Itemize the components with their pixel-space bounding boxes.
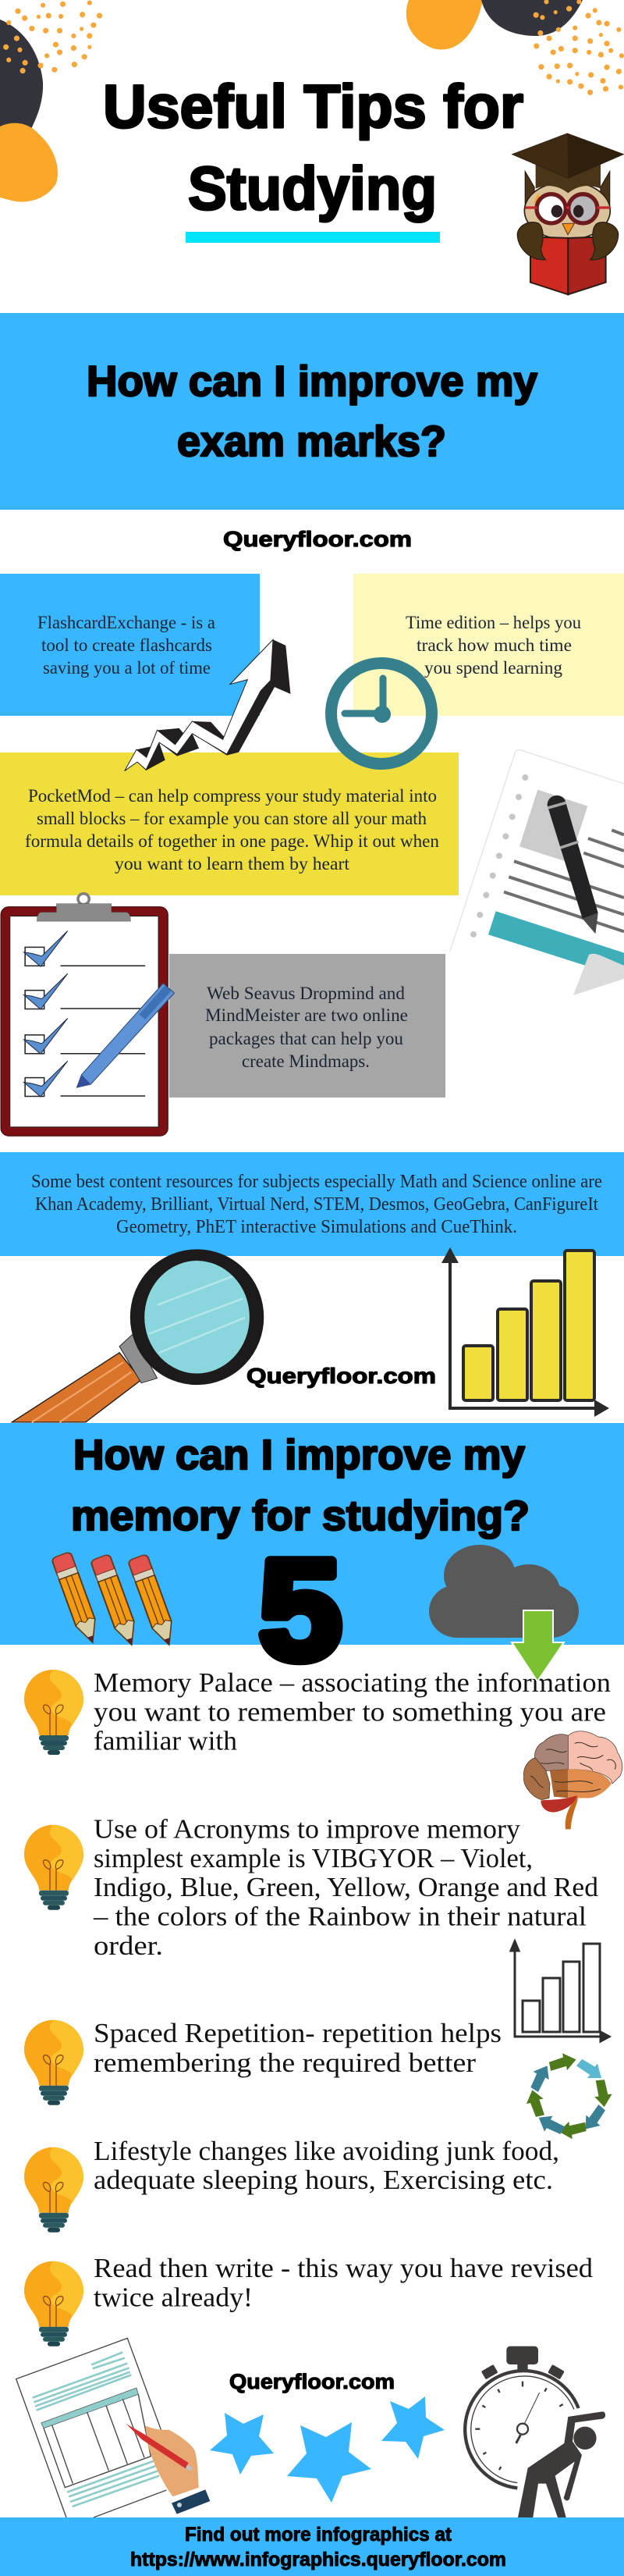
tip: acronyms: – the colors of the Rainbow in their natural — [93, 1902, 587, 1931]
icon: owl reading book — [512, 133, 623, 294]
band: content resources: Khan Academy, Brilliant, Virtual Nerd, STEM, Desmos, GeoGebra, CanFigureIt — [35, 1194, 598, 1215]
title underline — [186, 232, 440, 243]
band: memory heading — [0, 1423, 624, 1645]
icon: magnifying glass — [12, 1255, 257, 1422]
icon: clipboard checklist with blue pen — [1, 894, 174, 1136]
tip: Memory Palace: familiar with — [94, 1725, 237, 1756]
band: exam marks heading: How can I improve my — [87, 357, 537, 405]
panel: Mindmaps — [169, 954, 445, 1098]
band: content resources: Geometry, PhET interactive Simulations and CueThink. — [116, 1217, 517, 1237]
panel: Time edition: track how much time — [417, 635, 572, 655]
band: content resources: Some best content resources for subjects especially Math and Science online are — [31, 1172, 602, 1192]
panel: Mindmaps: create Mindmaps. — [242, 1051, 370, 1071]
tip icon: lightbulb 2 — [24, 1825, 83, 1910]
band: exam marks heading — [0, 313, 624, 510]
panel: Mindmaps: Web Seavus Dropmind and — [207, 984, 405, 1003]
panel: PocketMod: you want to learn them by heart — [115, 854, 350, 873]
panel: Time edition: you spend learning — [424, 658, 563, 678]
band: memory heading: How can I improve my — [73, 1432, 525, 1478]
panel: FlashcardExchange: tool to create flashcards — [41, 635, 212, 655]
panel: PocketMod — [0, 753, 459, 895]
tip icon: lightbulb 4 — [24, 2147, 83, 2233]
panel: FlashcardExchange: FlashcardExchange - is a — [37, 613, 215, 632]
tip: lifestyle changes: Lifestyle changes like avoiding junk food, — [94, 2136, 559, 2166]
icon: notebook page with pen — [450, 749, 624, 995]
brand: Queryfloor.com above stars: Queryfloor.com — [229, 2370, 395, 2393]
panel: Mindmaps: MindMeister are two online — [205, 1005, 408, 1025]
tip: read then write: Read then write - this way you have revised — [94, 2253, 594, 2283]
band: memory heading: memory for studying? — [71, 1493, 530, 1539]
panel: FlashcardExchange — [0, 574, 260, 716]
icon: three blue stars — [210, 2396, 445, 2503]
title: Useful Tips for — [103, 72, 523, 141]
icon: three pencils — [51, 1552, 179, 1648]
tip: acronyms: Indigo, Blue, Green, Yellow, Orange and Red — [94, 1872, 599, 1902]
title — [103, 72, 523, 222]
tip: Memory Palace: Memory Palace – associating the information — [94, 1667, 611, 1698]
tip: spaced repetition: remembering the required better — [94, 2048, 476, 2078]
title: Studying — [188, 154, 437, 222]
icon: circular arrows — [523, 2051, 613, 2140]
panel: Time edition — [353, 574, 624, 716]
tip: acronyms: order. — [94, 1930, 163, 1961]
tip: read then write — [94, 2253, 594, 2312]
tip: acronyms: simplest example is VIBGYOR – Violet, — [94, 1843, 533, 1873]
tip icon: lightbulb 5 — [24, 2261, 83, 2347]
tip: spaced repetition — [94, 2018, 502, 2078]
icon: cloud — [429, 1545, 579, 1638]
tip: lifestyle changes — [94, 2136, 559, 2195]
panel: PocketMod: formula details of together in one page. Whip it out when — [25, 831, 439, 851]
band: content resources — [0, 1152, 624, 1256]
tip: acronyms — [93, 1814, 599, 1961]
icon: brain — [523, 1731, 622, 1829]
panel: PocketMod: PocketMod – can help compress your study material into — [28, 786, 437, 806]
icon: stopwatch with stretching person — [465, 2347, 605, 2517]
icon: rising zigzag arrow — [125, 639, 290, 771]
decoration: top right blobs and dots — [406, 0, 624, 95]
panel: Mindmaps: packages that can help you — [209, 1029, 403, 1048]
tip: Memory Palace: you want to remember to something you are — [94, 1697, 606, 1727]
tip: spaced repetition: Spaced Repetition- repetition helps — [94, 2018, 502, 2048]
tip icon: lightbulb 1 — [24, 1670, 83, 1755]
chart: rising yellow bars — [441, 1247, 609, 1417]
footer band: Find out more infographics at — [185, 2524, 452, 2546]
tip icon: lightbulb 3 — [24, 2020, 83, 2105]
band: exam marks heading: exam marks? — [177, 417, 446, 465]
panel: Time edition: Time edition – helps you — [406, 613, 581, 632]
icon: invoice document with hand and pen — [16, 2338, 210, 2517]
tip: acronyms: Use of Acronyms to improve memory — [94, 1814, 521, 1844]
panel: FlashcardExchange: saving you a lot of time — [43, 658, 211, 678]
chart: outline bars — [511, 1941, 609, 2041]
icon: green download arrow — [512, 1610, 564, 1681]
footer band: https://www.infographics.queryfloor.com — [130, 2549, 506, 2571]
panel: PocketMod: small blocks – for example you can store all your math — [37, 809, 427, 828]
decoration: top left blobs and dots — [0, 0, 102, 202]
brand: Queryfloor.com beside magnifier: Queryfloor.com — [246, 1364, 436, 1388]
brand: Queryfloor.com: Queryfloor.com — [223, 527, 412, 551]
tip: lifestyle changes: adequate sleeping hours, Exercising etc. — [94, 2165, 553, 2195]
number five: 5 — [259, 1530, 342, 1689]
tip: Memory Palace — [94, 1667, 611, 1756]
icon: clock — [331, 664, 432, 763]
footer band — [0, 2517, 624, 2576]
tip: read then write: twice already! — [94, 2282, 253, 2312]
